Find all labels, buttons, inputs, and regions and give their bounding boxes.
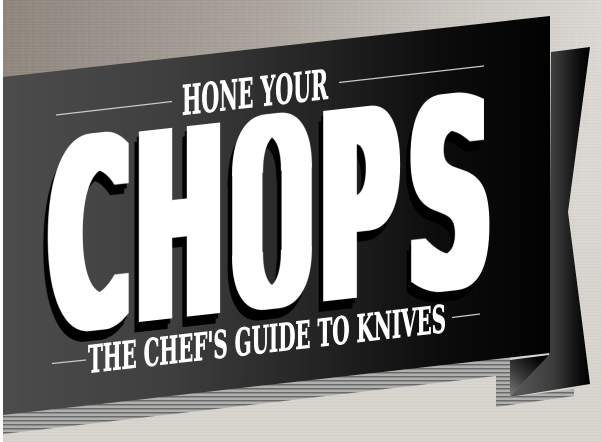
rule: lower left xyxy=(52,360,86,364)
title: chops: H xyxy=(136,70,223,384)
back ribbon tail xyxy=(510,47,590,397)
title: chops: S xyxy=(409,43,491,354)
rule: upper right xyxy=(339,66,484,82)
rule: upper left xyxy=(56,102,172,115)
title: chops: O xyxy=(235,84,309,266)
title: chops xyxy=(43,92,490,342)
title: chops: P xyxy=(321,52,397,363)
ribbon fold xyxy=(510,355,549,397)
title: chops: C xyxy=(49,81,129,393)
heading: hone your: HONE YOUR xyxy=(182,60,328,125)
rule: lower right xyxy=(452,314,480,318)
title: chops: O xyxy=(235,165,309,347)
striped drop shadow xyxy=(3,357,574,434)
